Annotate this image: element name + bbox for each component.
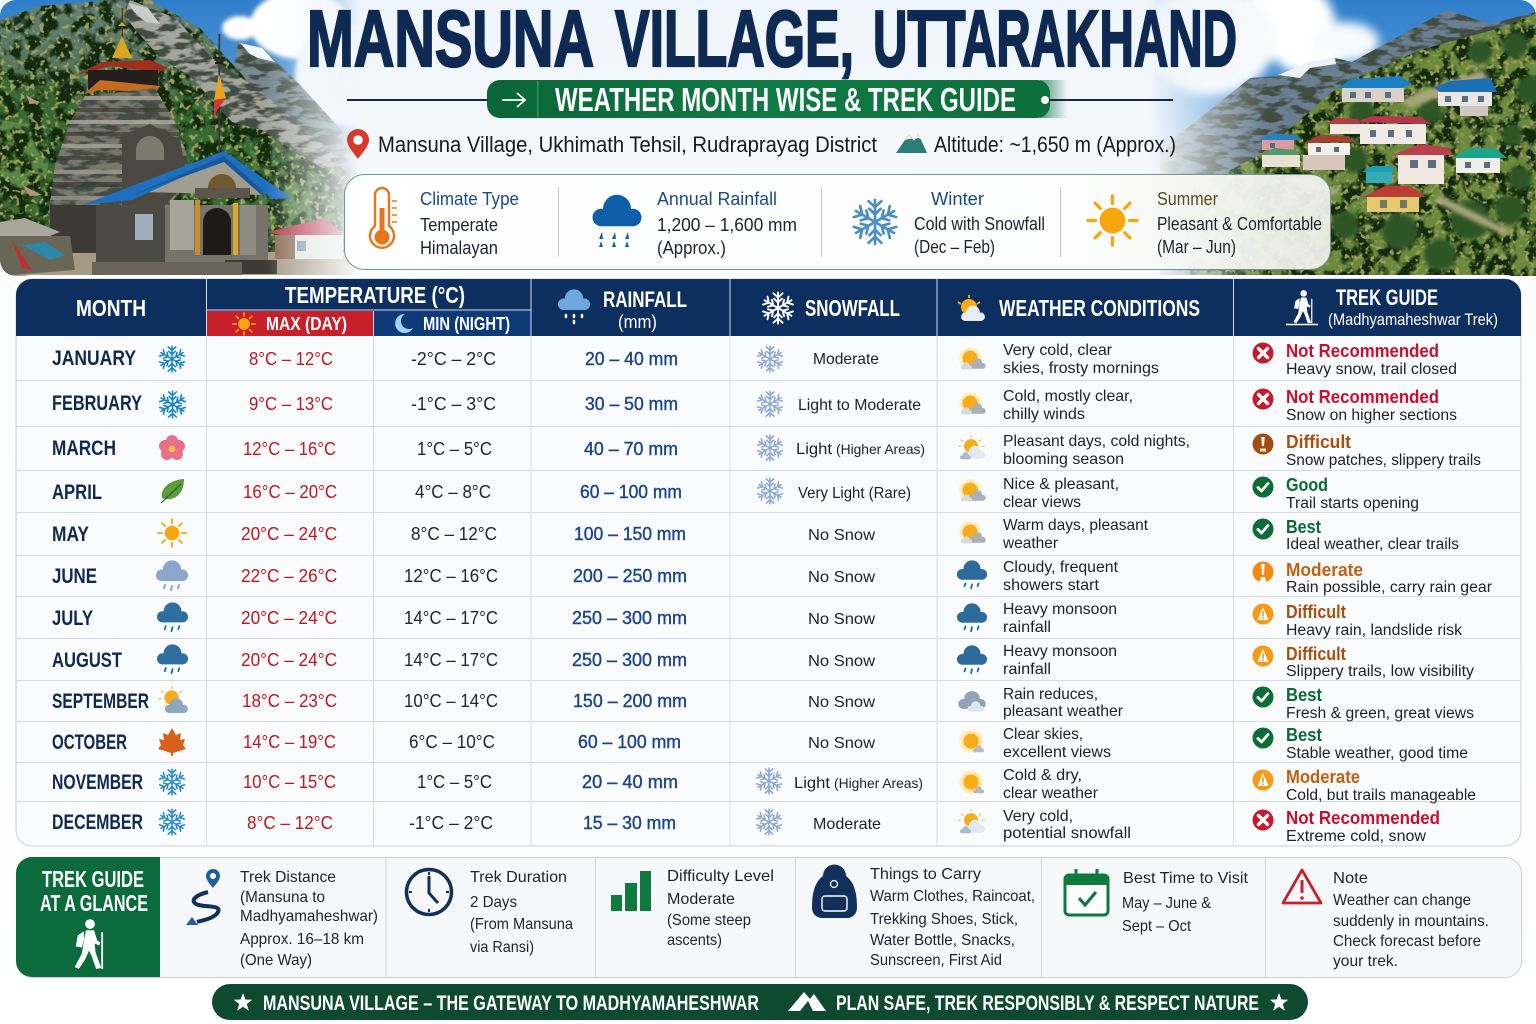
difficulty text: (Some steep bbox=[667, 912, 751, 929]
row: June: showers start bbox=[1003, 577, 1100, 594]
row: August: 20°C – 24°C bbox=[241, 650, 337, 670]
icon: mountain bbox=[896, 133, 927, 153]
row: January: Very cold, clear bbox=[1003, 342, 1113, 359]
row: July: Heavy monsoon bbox=[1003, 601, 1117, 618]
row: January: 8°C – 12°C bbox=[249, 349, 333, 369]
row: April: 60 – 100 mm bbox=[580, 482, 682, 502]
row: March: Light bbox=[796, 441, 833, 458]
row: January bbox=[52, 340, 1457, 378]
icon: footer mountains bbox=[788, 992, 826, 1011]
row: July: 20°C – 24°C bbox=[241, 608, 337, 628]
row: May: Best bbox=[1286, 516, 1321, 537]
row: June: 200 – 250 mm bbox=[573, 566, 687, 586]
icon: header rain cloud bbox=[558, 289, 590, 323]
row: July: No Snow bbox=[808, 611, 875, 628]
header: rainfall: (mm) bbox=[618, 312, 657, 332]
row: April: Good bbox=[1286, 474, 1328, 495]
icon: maple leaf bbox=[158, 728, 186, 756]
illustration: rocks and prayer cloths bbox=[0, 218, 75, 276]
row: February: Not Recommended bbox=[1286, 386, 1439, 407]
row: August: AUGUST bbox=[52, 649, 122, 672]
row: May: MAY bbox=[52, 523, 89, 546]
footer text: plan safe: PLAN SAFE, TREK RESPONSIBLY & RESPECT NATURE bbox=[836, 992, 1259, 1015]
icon: snowflake bbox=[853, 200, 897, 244]
footer banner bbox=[212, 984, 1308, 1020]
row: June: No Snow bbox=[808, 569, 875, 586]
row: August: 250 – 300 mm bbox=[572, 650, 687, 670]
illustration: temple spire bbox=[48, 8, 187, 253]
winter text bbox=[914, 189, 1045, 257]
row: September: Rain reduces, bbox=[1003, 686, 1098, 703]
header: rainfall bbox=[603, 287, 687, 332]
row: March: (Higher Areas) bbox=[836, 441, 925, 457]
row: August: Heavy monsoon bbox=[1003, 643, 1117, 660]
row: September: Fresh & green, great views bbox=[1286, 705, 1474, 722]
climate type text: Himalayan bbox=[420, 238, 498, 258]
row: July: 250 – 300 mm bbox=[572, 608, 687, 628]
row: March: Snow patches, slippery trails bbox=[1286, 452, 1481, 469]
row: July: Heavy rain, landslide risk bbox=[1286, 622, 1462, 639]
trek distance text: Trek Distance bbox=[240, 869, 336, 886]
row: May: 20°C – 24°C bbox=[241, 524, 337, 544]
row: April: Trail starts opening bbox=[1286, 495, 1419, 512]
icon: snowflake bbox=[159, 346, 185, 372]
row: September: No Snow bbox=[808, 694, 875, 711]
icon: clock bbox=[406, 870, 452, 914]
icon: sun bbox=[1088, 196, 1137, 245]
footer text: gateway: MANSUNA VILLAGE – THE GATEWAY TO MADHYAMAHESHWAR bbox=[263, 992, 759, 1015]
row: September: pleasant weather bbox=[1003, 703, 1124, 720]
trek distance text bbox=[240, 869, 378, 969]
trek duration text: via Ransi) bbox=[470, 939, 534, 956]
note text: Check forecast before bbox=[1333, 933, 1481, 950]
row: May: Warm days, pleasant bbox=[1003, 517, 1149, 534]
row: January: skies, frosty mornings bbox=[1003, 360, 1159, 377]
best time text: Sept – Oct bbox=[1122, 918, 1192, 935]
row: December: Not Recommended bbox=[1286, 807, 1440, 828]
row: June: JUNE bbox=[52, 565, 97, 588]
icon: ribbon arrow bbox=[502, 93, 525, 107]
header: month: MONTH bbox=[76, 295, 146, 321]
trek distance text: Approx. 16–18 km bbox=[240, 931, 364, 948]
icon: difficulty bars bbox=[611, 871, 651, 911]
row: December: Moderate bbox=[813, 816, 881, 833]
row: March: 12°C – 16°C bbox=[243, 439, 336, 459]
row: August: 14°C – 17°C bbox=[404, 650, 498, 670]
trek distance text: Madhyamaheshwar) bbox=[240, 908, 378, 925]
row: November: (Higher Areas) bbox=[834, 775, 923, 791]
green label block: TREK GUIDE bbox=[42, 866, 144, 892]
things to carry text: Water Bottle, Snacks, bbox=[870, 932, 1015, 949]
row: September: SEPTEMBER bbox=[52, 690, 149, 713]
row: March: 1°C – 5°C bbox=[417, 439, 492, 459]
row: October bbox=[52, 724, 1468, 762]
header: trek guide bbox=[1328, 285, 1498, 329]
row: December: 15 – 30 mm bbox=[583, 813, 676, 833]
row: April: 4°C – 8°C bbox=[415, 482, 491, 502]
row: April: clear views bbox=[1003, 494, 1081, 511]
summer text: Pleasant & Comfortable bbox=[1157, 214, 1322, 234]
row: December: Very cold, bbox=[1003, 808, 1073, 825]
row: January: -2°C – 2°C bbox=[411, 349, 496, 369]
things to carry text: Trekking Shoes, Stick, bbox=[870, 911, 1018, 928]
difficulty text bbox=[667, 868, 774, 949]
annual rainfall text: (Approx.) bbox=[657, 238, 726, 258]
trek distance text: (One Way) bbox=[240, 952, 312, 969]
left photo: mountain temple bbox=[0, 0, 356, 276]
row: August bbox=[52, 643, 1474, 680]
row: December: DECEMBER bbox=[52, 811, 143, 834]
row: February: 9°C – 13°C bbox=[249, 394, 333, 414]
header: snowfall: SNOWFALL bbox=[805, 295, 900, 321]
row: May bbox=[52, 516, 1459, 553]
row: November: clear weather bbox=[1003, 785, 1099, 802]
subtitle text: WEATHER MONTH WISE & TREK GUIDE bbox=[555, 81, 1016, 118]
row: March: 40 – 70 mm bbox=[584, 439, 678, 459]
row: May: Ideal weather, clear trails bbox=[1286, 536, 1459, 553]
trek duration text: (From Mansuna bbox=[470, 916, 573, 933]
icon: header sun bbox=[233, 313, 255, 335]
header: temperature: TEMPERATURE (°C) bbox=[285, 282, 465, 308]
green label block: AT A GLANCE bbox=[40, 890, 148, 916]
row: April bbox=[52, 474, 1419, 512]
green label block bbox=[16, 857, 160, 977]
row: October: Clear skies, bbox=[1003, 726, 1083, 743]
row: January: Moderate bbox=[813, 351, 879, 368]
icon: flower bbox=[159, 435, 185, 460]
location line bbox=[347, 129, 1176, 159]
row: May: No Snow bbox=[808, 527, 875, 544]
illustration: village houses bbox=[1258, 76, 1507, 212]
icon: location pin bbox=[347, 129, 369, 159]
row: July: Difficult bbox=[1286, 601, 1346, 622]
row: November: Light bbox=[794, 775, 831, 792]
row: March bbox=[52, 431, 1481, 469]
row: February: 30 – 50 mm bbox=[585, 394, 678, 414]
row: May: 8°C – 12°C bbox=[411, 524, 497, 544]
row: November bbox=[52, 766, 1476, 804]
row: January: Not Recommended bbox=[1286, 340, 1439, 361]
annual rainfall text: 1,200 – 1,600 mm bbox=[657, 215, 797, 235]
annual rainfall text bbox=[657, 189, 797, 258]
trek duration text: 2 Days bbox=[470, 894, 517, 911]
row: September: 10°C – 14°C bbox=[404, 691, 498, 711]
row: November: Cold, but trails manageable bbox=[1286, 787, 1476, 804]
month name: JANUARY bbox=[52, 347, 136, 370]
header: rainfall: RAINFALL bbox=[603, 287, 687, 312]
row: December: 8°C – 12°C bbox=[247, 813, 333, 833]
difficulty text: ascents) bbox=[667, 932, 722, 949]
row: November: Cold & dry, bbox=[1003, 767, 1082, 784]
illustration: small pink-roof house bbox=[268, 218, 345, 259]
header: trek guide: TREK GUIDE bbox=[1336, 285, 1438, 310]
row: December bbox=[52, 807, 1440, 845]
best time text: Best Time to Visit bbox=[1123, 870, 1249, 887]
row: February: Light to Moderate bbox=[798, 397, 921, 414]
row: March: blooming season bbox=[1003, 451, 1124, 468]
difficulty text: Moderate bbox=[667, 891, 735, 908]
things to carry text: Warm Clothes, Raincoat, bbox=[870, 888, 1035, 905]
annual rainfall text: Annual Rainfall bbox=[657, 189, 777, 209]
note text: Weather can change bbox=[1333, 892, 1471, 909]
row: February: chilly winds bbox=[1003, 406, 1085, 423]
difficulty text: Difficulty Level bbox=[667, 868, 774, 885]
climate type text: Climate Type bbox=[420, 189, 519, 209]
icon: header weather bbox=[958, 295, 985, 321]
panel: monthly weather table bbox=[13, 275, 1524, 849]
subtitle ribbon bbox=[347, 80, 1173, 118]
row: April: Very Light (Rare) bbox=[798, 485, 911, 502]
row: February bbox=[52, 386, 1457, 424]
row: September: 150 – 200 mm bbox=[573, 691, 687, 711]
row: October: No Snow bbox=[808, 735, 875, 752]
icon: header hiker bbox=[1286, 290, 1318, 324]
things to carry text bbox=[870, 866, 1035, 969]
row: November: 10°C – 15°C bbox=[243, 772, 336, 792]
row: January: Heavy snow, trail closed bbox=[1286, 361, 1457, 378]
row: August: No Snow bbox=[808, 653, 875, 670]
title bbox=[307, 0, 1237, 83]
note text: your trek. bbox=[1333, 953, 1398, 970]
header: trek guide: (Madhyamaheshwar Trek) bbox=[1328, 310, 1498, 329]
row: July: JULY bbox=[52, 607, 93, 630]
row: December: Extreme cold, snow bbox=[1286, 828, 1427, 845]
row: September: Best bbox=[1286, 684, 1322, 705]
summer text: Summer bbox=[1157, 189, 1218, 209]
row: June bbox=[52, 559, 1492, 596]
row: October: excellent views bbox=[1003, 744, 1111, 761]
row: September bbox=[52, 684, 1474, 722]
row: October: 6°C – 10°C bbox=[409, 732, 495, 752]
row: August: rainfall bbox=[1003, 661, 1051, 678]
row: January: 20 – 40 mm bbox=[585, 349, 678, 369]
trek distance text: (Mansuna to bbox=[240, 889, 325, 906]
illustration: temple hall with blue roof bbox=[82, 151, 292, 275]
note text: suddenly in mountains. bbox=[1333, 913, 1489, 930]
row: August: Slippery trails, low visibility bbox=[1286, 663, 1474, 680]
summer text bbox=[1157, 189, 1322, 257]
header: weather conditions: WEATHER CONDITIONS bbox=[999, 295, 1200, 321]
row: February: -1°C – 3°C bbox=[411, 394, 496, 414]
icon: calendar bbox=[1065, 869, 1108, 915]
icon: warning triangle bbox=[1283, 870, 1321, 903]
panel: climate summary bbox=[344, 174, 1330, 270]
row: November: NOVEMBER bbox=[52, 771, 143, 794]
row: June: Rain possible, carry rain gear bbox=[1286, 579, 1492, 596]
winter text: Winter bbox=[931, 189, 984, 209]
row: March: MARCH bbox=[52, 437, 116, 460]
icon: star right bbox=[1270, 993, 1288, 1011]
row: June: Moderate bbox=[1286, 559, 1363, 580]
things to carry text: Sunscreen, First Aid bbox=[870, 952, 1002, 969]
icon: thermometer bbox=[370, 188, 397, 248]
row: April: 16°C – 20°C bbox=[243, 482, 337, 502]
best time text bbox=[1122, 870, 1249, 935]
row: September: 18°C – 23°C bbox=[242, 691, 337, 711]
row: February: Snow on higher sections bbox=[1286, 407, 1457, 424]
row: June: 22°C – 26°C bbox=[241, 566, 337, 586]
row: June: 12°C – 16°C bbox=[404, 566, 498, 586]
header: max day: MAX (DAY) bbox=[266, 314, 347, 334]
row: October: 14°C – 19°C bbox=[243, 732, 336, 752]
note text: Note bbox=[1333, 870, 1368, 887]
row: February: Cold, mostly clear, bbox=[1003, 388, 1133, 405]
climate type text bbox=[420, 189, 519, 258]
row: November: Moderate bbox=[1286, 766, 1360, 787]
row: November: 20 – 40 mm bbox=[582, 772, 678, 792]
icon: hiker bbox=[75, 919, 103, 969]
icon: backpack bbox=[812, 864, 857, 918]
location text: Mansuna Village, Ukhimath Tehsil, Rudraprayag District bbox=[378, 132, 877, 157]
row: December: potential snowfall bbox=[1003, 825, 1131, 842]
things to carry text: Things to Carry bbox=[870, 866, 981, 883]
row: March: Pleasant days, cold nights, bbox=[1003, 433, 1190, 450]
icon: leaf bbox=[161, 479, 184, 503]
row: July bbox=[52, 601, 1462, 639]
row: December: -1°C – 2°C bbox=[409, 813, 493, 833]
icon: moon bbox=[395, 314, 413, 333]
note text bbox=[1333, 870, 1489, 970]
row: May: weather bbox=[1002, 535, 1059, 552]
icon: star bbox=[234, 993, 252, 1011]
panel: trek guide at a glance bbox=[16, 857, 1522, 978]
icon: rain cloud bbox=[592, 195, 642, 247]
row: February: FEBRUARY bbox=[52, 392, 142, 415]
row: July: rainfall bbox=[1003, 619, 1051, 636]
row: October: Best bbox=[1286, 724, 1322, 745]
climate type text: Temperate bbox=[420, 215, 498, 235]
icon: winding trail with pin bbox=[186, 869, 220, 925]
trek duration text bbox=[470, 869, 573, 956]
row: October: Stable weather, good time bbox=[1286, 745, 1468, 762]
right photo: hillside village bbox=[1145, 0, 1536, 280]
best time text: May – June & bbox=[1122, 895, 1211, 912]
row: April: Nice & pleasant, bbox=[1003, 476, 1119, 493]
row: June: Cloudy, frequent bbox=[1003, 559, 1119, 576]
trek duration text: Trek Duration bbox=[470, 869, 567, 886]
row: August: Difficult bbox=[1286, 643, 1346, 664]
row: April: APRIL bbox=[52, 481, 102, 504]
table header bbox=[16, 279, 1521, 336]
row: May: 100 – 150 mm bbox=[574, 524, 686, 544]
altitude text: Altitude: ~1,650 m (Approx.) bbox=[934, 132, 1176, 157]
row: October: 60 – 100 mm bbox=[578, 732, 681, 752]
summer text: (Mar – Jun) bbox=[1157, 237, 1236, 257]
winter text: (Dec – Feb) bbox=[914, 237, 995, 257]
row: March: Difficult bbox=[1286, 431, 1351, 452]
icon: header snowflake bbox=[762, 292, 794, 324]
row: November: 1°C – 5°C bbox=[417, 772, 492, 792]
icon: flag on pole bbox=[213, 34, 226, 154]
header: min night: MIN (NIGHT) bbox=[423, 314, 510, 334]
winter text: Cold with Snowfall bbox=[914, 214, 1045, 234]
row: July: 14°C – 17°C bbox=[404, 608, 498, 628]
row: October: OCTOBER bbox=[52, 731, 127, 754]
